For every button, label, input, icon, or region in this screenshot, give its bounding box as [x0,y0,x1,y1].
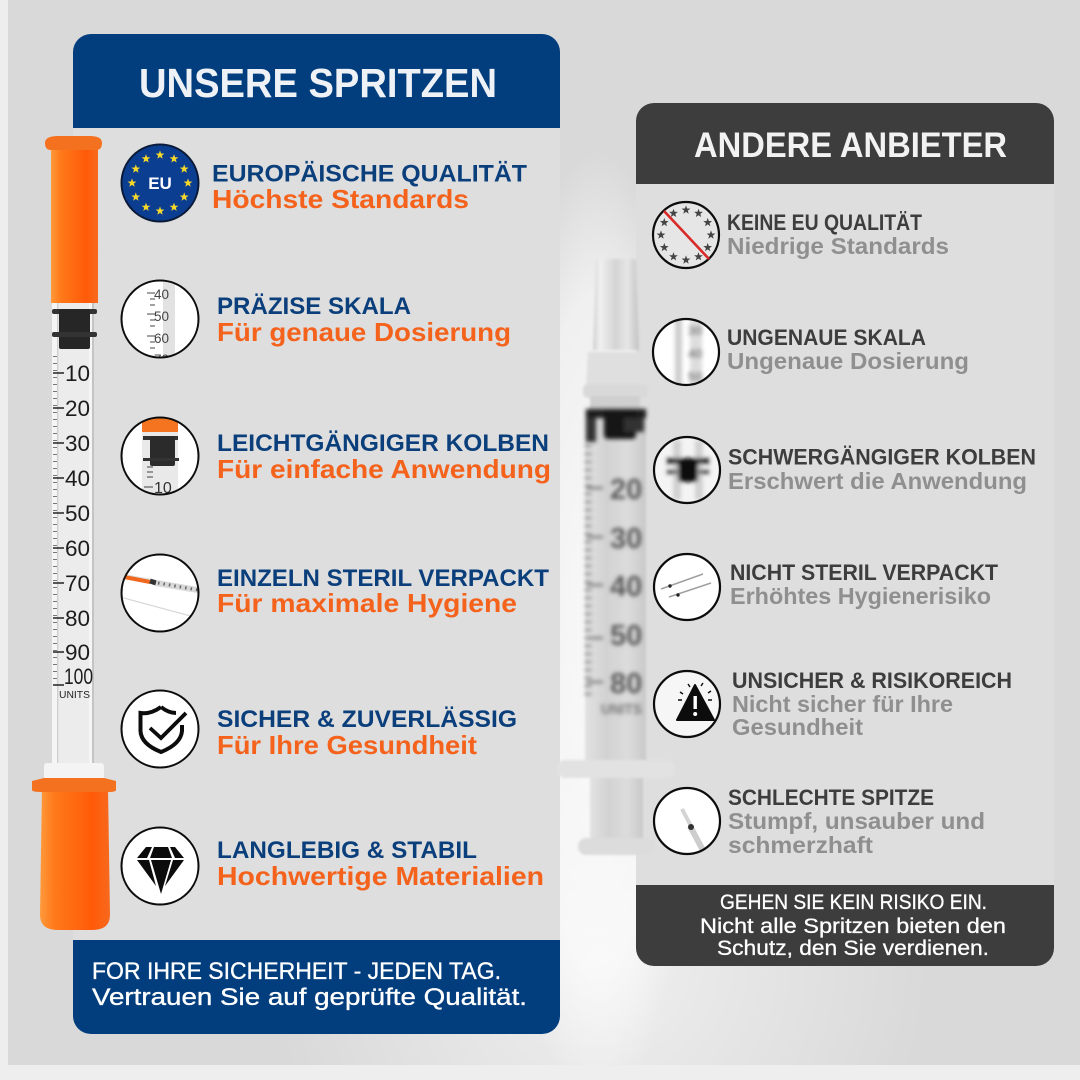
text: schwergängiger kolben: SCHWERGÄNGIGER KOLBEN [728,444,1036,470]
text: schlechte spitze: Stumpf, unsauber und [728,808,985,834]
text: langlebig und stabil [217,837,544,891]
text: einzeln steril verpackt: Für maximale Hygiene [217,588,517,618]
text: sicher und zuverlässig: SICHER & ZUVERLÄSSIG [217,706,517,733]
icon: diamond [122,828,198,904]
text: präzise skala [217,293,511,347]
text: unsicher und risikoreich: Nicht sicher für Ihre [732,691,953,717]
orange needle cap [45,136,102,303]
icon: scale: 40 [154,287,169,302]
syringe scale: 30 [65,431,90,456]
syringe scale: 70 [65,571,90,596]
text: präzise skala: Für genaue Dosierung [217,317,511,347]
icon: warning triangle [654,671,720,737]
icon: blurred scale: 40 [688,346,702,361]
icon: EU stars [122,144,198,222]
footer bar: sicherheit [73,940,560,1034]
row: unsicher und risikoreich [654,668,1012,740]
icon: shield check [122,690,198,768]
row: schwergängiger kolben [654,437,1036,503]
syringe barrel [52,303,94,768]
icon: plunger: 10 [154,480,172,497]
orange syringe [32,136,116,930]
text: langlebig und stabil: Hochwertige Materialien [217,861,544,891]
blurred syringe scale: 20 [610,474,642,506]
orange plunger cap [32,778,116,930]
icon: plunger [122,417,198,497]
icon: needle tip [654,788,720,856]
text: ungenaue skala: UNGENAUE SKALA [727,325,926,350]
text: unsicher und risikoreich: Gesundheit [732,714,863,740]
feature: leichtgängiger kolben [122,417,551,497]
blurred syringe scale: 30 [610,523,642,555]
footer bar: kein risiko: Schutz, den Sie verdienen. [717,937,989,960]
panel: unsere spritzen [73,34,560,1034]
blurred syringe body [557,259,675,855]
syringe scale: 100 [64,664,93,689]
row: nicht steril verpackt [654,554,999,620]
text: europäische qualität: EUROPÄISCHE QUALITÄT [212,160,527,188]
blurred syringe scale: 40 [610,571,642,603]
text: sicher und zuverlässig [217,706,517,760]
footer bar: kein risiko: GEHEN SIE KEIN RISIKO EIN. [720,891,987,914]
feature: langlebig und stabil [122,828,544,904]
heading bar: andere anbieter [636,103,1054,184]
text: leichtgängiger kolben: Für einfache Anwendung [217,454,551,484]
syringe scale: 60 [65,536,90,561]
text: europäische qualität: Höchste Standards [212,184,469,214]
syringe scale: 10 [65,361,90,386]
syringe scale: 90 [65,640,90,665]
syringe scale: 50 [65,501,90,526]
footer bar: sicherheit: Vertrauen Sie auf geprüfte Qualität. [92,984,527,1011]
text: einzeln steril verpackt: EINZELN STERIL VERPACKT [217,565,549,592]
text: schwergängiger kolben [728,444,1036,494]
text: schlechte spitze: schmerzhaft [728,832,873,858]
text: ungenaue skala [727,325,969,374]
icon: blurred scale [653,318,719,388]
text: leichtgängiger kolben [217,430,551,484]
feature: europäische qualität [122,144,527,222]
feature: präzise skala [122,280,511,367]
blurred syringe scale [587,445,642,718]
text: leichtgängiger kolben: LEICHTGÄNGIGER KOLBEN [217,430,549,457]
syringe scale: 20 [65,396,90,421]
blurred syringe scale: UNITS [601,701,642,718]
blurred syringe plunger [586,409,646,442]
syringe scale: 40 [65,466,90,491]
text: unsicher und risikoreich [732,668,1012,740]
text: ungenaue skala: Ungenaue Dosierung [727,348,969,374]
icon: packaged syringe [120,554,198,632]
footer bar: sicherheit: FOR IHRE SICHERHEIT - JEDEN TAG. [92,958,501,985]
text: einzeln steril verpackt [217,565,549,618]
icon: loose syringes [654,554,720,620]
heading bar: unsere spritzen: UNSERE SPRITZEN [139,60,497,106]
icon: blurred scale: 30 [688,323,702,338]
icon: scale [122,280,198,367]
icon: blurred plunger [654,437,720,503]
footer bar: kein risiko [636,885,1054,966]
blurred syringe scale: 80 [610,668,642,700]
text: nicht steril verpackt: Erhöhtes Hygienerisiko [730,583,991,609]
text: europäische qualität [212,160,527,214]
text: schlechte spitze: SCHLECHTE SPITZE [728,785,934,810]
feature: einzeln steril verpackt [120,554,549,632]
blurred syringe [557,259,675,855]
text: keine eu qualität [727,210,949,259]
heading bar: unsere spritzen [73,34,560,128]
text: präzise skala: PRÄZISE SKALA [217,293,411,320]
icon: EU stars: EU [148,174,172,193]
icon: scale: 50 [154,309,169,324]
syringe black plunger [52,309,97,349]
text: sicher und zuverlässig: Für Ihre Gesundheit [217,730,477,760]
text: schwergängiger kolben: Erschwert die Anwendung [728,468,1027,494]
icon: scale: 70 [154,352,169,367]
text: langlebig und stabil: LANGLEBIG & STABIL [217,837,477,864]
text: keine eu qualität: KEINE EU QUALITÄT [727,210,922,235]
blurred syringe scale: 50 [610,620,642,652]
syringe clear flange [44,763,104,781]
text: nicht steril verpackt [730,560,999,609]
icon: blurred scale: 50 [688,369,702,384]
text: unsicher und risikoreich: UNSICHER & RISIKOREICH [732,668,1012,693]
text: nicht steril verpackt: NICHT STERIL VERPACKT [730,560,999,585]
row: ungenaue skala [653,318,969,388]
syringe scale [53,356,93,701]
icon: scale: 60 [154,331,169,346]
comparison rows: andere anbieter [653,202,1036,858]
feature: sicher und zuverlässig [122,690,517,768]
syringe scale: UNITS [59,690,90,701]
panel: andere anbieter [636,103,1054,966]
text: keine eu qualität: Niedrige Standards [727,233,949,259]
row: schlechte spitze [654,785,985,858]
text: schlechte spitze [728,785,985,858]
footer bar: kein risiko: Nicht alle Spritzen bieten den [700,915,1006,938]
heading bar: andere anbieter: ANDERE ANBIETER [694,126,1007,165]
syringe scale: 80 [65,606,90,631]
icon: crossed EU stars [653,202,719,268]
row: keine eu qualität [653,202,949,268]
